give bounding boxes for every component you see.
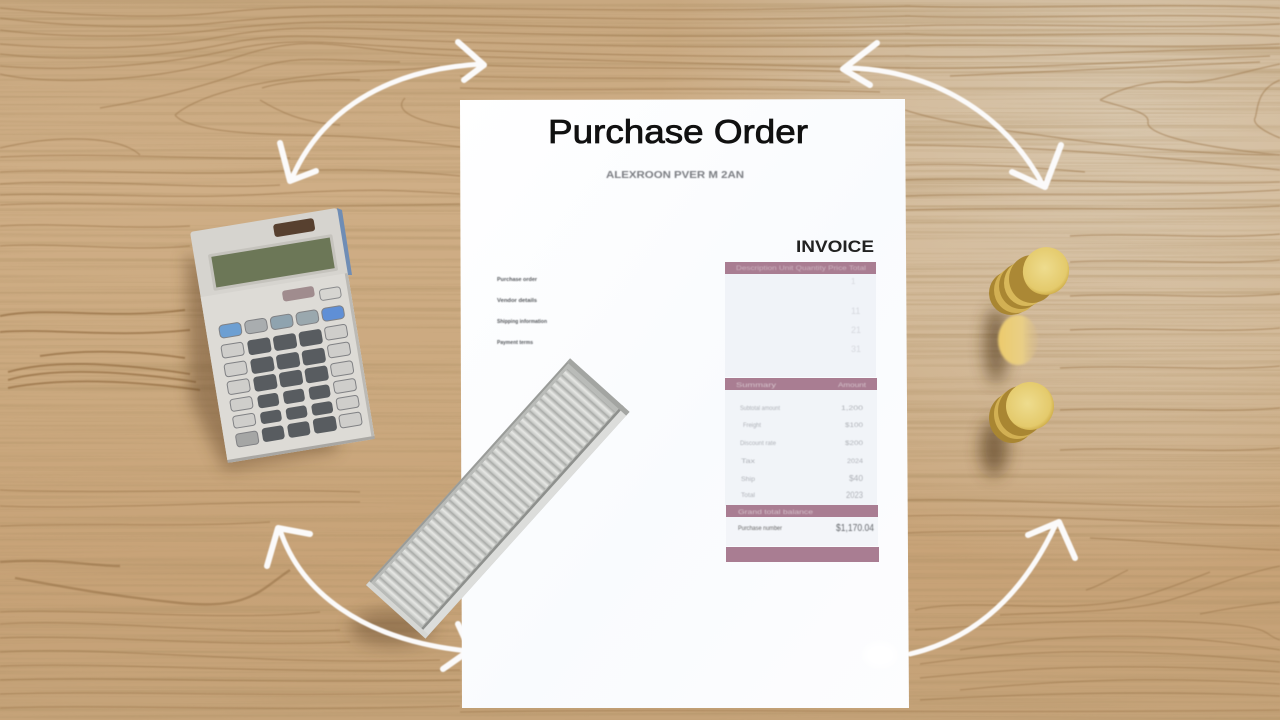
table text: Tax [741,459,755,465]
icon: calculator [186,208,375,470]
arrow: top right double-headed [843,43,1061,187]
table text: Total [741,493,755,499]
table text: 11 [851,306,860,316]
table text: $200 [845,441,864,447]
coin stack: top [983,241,1076,321]
solar panel [273,218,315,237]
left field labels: Vendor details [497,298,537,304]
display [208,234,338,291]
arrow: bottom right [910,522,1075,654]
table text [736,266,874,534]
top buttons [282,286,315,302]
keypad [218,305,363,447]
invoice table [725,262,879,562]
left field labels [497,277,548,346]
table text: 21 [851,325,861,335]
left field labels: Shipping information [497,319,548,325]
arrows cycle [267,42,1075,669]
table text: Ship [741,477,756,483]
table text: Discount rate [740,441,777,447]
table text: Purchase number [738,526,782,532]
icon: gold coin stacks [980,241,1076,476]
corrugated ribs [375,369,615,625]
table text: Grand total balance [738,510,814,516]
icon: shipping container [366,358,634,643]
left field labels: Payment terms [497,340,533,346]
table text: $40 [849,474,864,483]
table text: $100 [845,423,864,429]
subtitle: ALEXROON PVER M 2AN [606,169,744,181]
invoice heading: INVOICE [796,237,874,256]
table text: 1,200 [841,406,864,412]
table header bars [725,262,879,562]
table text: Freight [743,423,761,429]
table text: 1 [851,277,856,286]
table text: 2023 [846,490,863,500]
table text: Summary [736,383,776,389]
table text: 31 [851,344,861,354]
table text: Subtotal amount [740,406,780,412]
arrow: top left double-headed [280,42,484,181]
table text: Description Unit Quantity Price Total [736,266,866,272]
coin: blurred middle [998,315,1038,365]
table text: Amount [838,383,866,389]
table text: $1,170.04 [836,523,874,534]
table text: 2024 [847,459,864,465]
paper document [460,99,909,708]
arrow: bottom left double-headed [267,528,470,669]
coin stack: bottom [989,382,1054,443]
title: Purchase Order [548,114,808,151]
left field labels: Purchase order [497,277,538,283]
